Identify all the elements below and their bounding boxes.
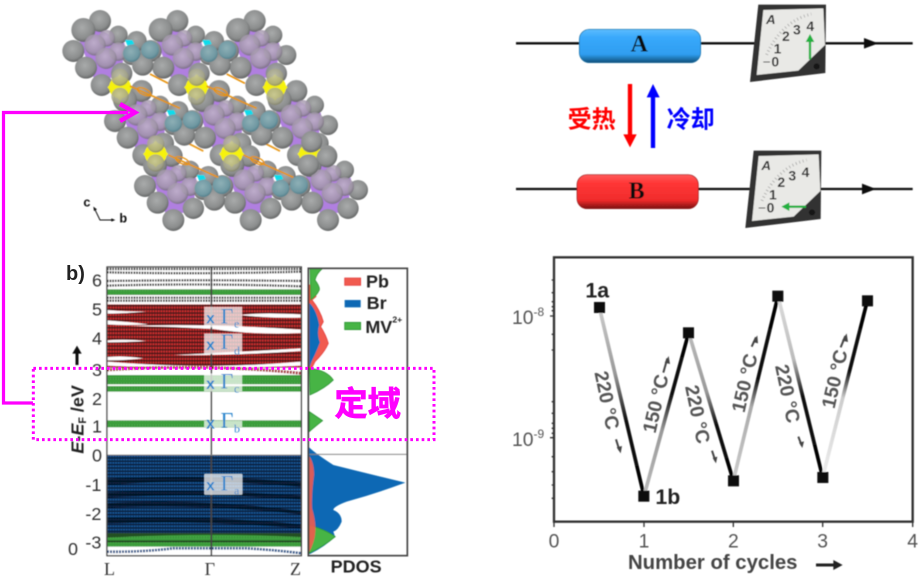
- x tick labels: 0: [549, 531, 559, 552]
- y axis labels: 0: [68, 539, 78, 559]
- PDOS legend: MV: [365, 317, 392, 337]
- temperature labels: 220 °C: [680, 383, 713, 446]
- gamma markers: Γ: [221, 470, 233, 495]
- gamma markers: x: [206, 310, 215, 327]
- PDOS legend: Br: [367, 293, 387, 313]
- y axis labels: [68, 271, 301, 577]
- PDOS label: PDOS: [331, 556, 382, 576]
- gamma markers: x: [206, 376, 215, 393]
- frame and ticks: [550, 257, 913, 527]
- gamma markers: e: [234, 317, 239, 331]
- x axis title: Number of cycles: [628, 552, 797, 574]
- y axis labels: -1: [85, 475, 101, 495]
- point labels: [585, 278, 680, 509]
- top circuit: A: [631, 32, 649, 58]
- y axis labels: -3: [85, 532, 101, 552]
- cooling arrow and label: 冷却: [667, 106, 715, 133]
- bottom circuit: B: [629, 178, 645, 204]
- PDOS legend: [345, 272, 402, 337]
- top circuit: [516, 5, 913, 82]
- PDOS chart: [308, 268, 407, 556]
- valence bands: blue: [107, 455, 301, 533]
- y axis labels: 6: [92, 271, 102, 291]
- flat green bands: [107, 375, 301, 384]
- y axis labels: -2: [85, 504, 101, 524]
- temperature labels: 150 °C: [819, 348, 853, 410]
- y axis labels: 5: [92, 300, 102, 320]
- energy axis title: F: [77, 417, 89, 424]
- x tick labels: 1: [639, 531, 649, 552]
- y tick labels: -9: [533, 427, 544, 441]
- y axis labels: 2: [92, 389, 102, 409]
- gamma markers: x: [206, 337, 215, 354]
- bottom circuit: [516, 151, 913, 228]
- y tick labels: 10: [512, 308, 533, 329]
- heating arrow and label: [568, 84, 637, 147]
- band diagram: [107, 267, 301, 556]
- PDOS legend: 2+: [392, 314, 402, 324]
- gamma markers: Γ: [221, 303, 233, 328]
- gamma markers: a: [234, 483, 240, 497]
- y tick labels: -8: [533, 305, 544, 319]
- gamma markers: x: [206, 477, 215, 494]
- dotted localized box: [33, 368, 434, 440]
- localized label: 定域: [334, 387, 401, 424]
- gamma line and frame: [209, 267, 214, 556]
- point labels: 1b: [655, 485, 680, 509]
- direction arrows: [616, 333, 848, 463]
- y axis labels: 3: [92, 360, 102, 380]
- temperature labels: 150 °C: [729, 352, 763, 414]
- panel label b): b): [66, 263, 85, 285]
- y axis labels: 0: [92, 446, 102, 466]
- x tick labels: 2: [728, 531, 739, 552]
- y axis labels: 4: [92, 328, 102, 348]
- temperature labels: [589, 348, 853, 446]
- temperature labels: 220 °C: [589, 369, 622, 432]
- gamma markers: x: [206, 415, 215, 432]
- energy axis title: E-E: [67, 424, 87, 454]
- energy axis title: [67, 346, 89, 454]
- cooling arrow and label: [647, 84, 715, 148]
- energy axis title: /eV: [67, 385, 87, 417]
- band structure and PDOS: [33, 263, 434, 577]
- lower green bands: [107, 533, 301, 547]
- data line: [599, 296, 867, 496]
- y axis labels: 1: [92, 416, 102, 436]
- gamma markers: c: [234, 382, 239, 396]
- crystal structure: [62, 10, 368, 231]
- axes c and b: b: [119, 212, 127, 226]
- axes c and b: [83, 196, 127, 226]
- y tick labels: 10: [512, 430, 533, 451]
- x tick labels: [549, 531, 918, 552]
- x tick labels: 3: [817, 531, 828, 552]
- magenta connector arrow: [4, 104, 135, 403]
- gamma markers: Γ: [221, 329, 233, 354]
- gamma markers: b: [234, 421, 240, 435]
- gamma markers: Γ: [221, 368, 233, 393]
- x tick labels: 4: [907, 531, 918, 552]
- data points: [594, 291, 873, 502]
- gamma markers: Γ: [221, 408, 233, 433]
- temperature labels: 150 °C: [640, 373, 674, 435]
- PDOS legend: Pb: [366, 272, 389, 292]
- circuit diagram: [516, 5, 913, 228]
- heating arrow and label: 受热: [568, 106, 616, 133]
- temperature labels: 220 °C: [770, 363, 803, 425]
- point labels: 1a: [585, 278, 609, 302]
- axes c and b: c: [83, 196, 90, 210]
- conduction bands: red: [107, 304, 301, 368]
- gamma markers: d: [234, 343, 240, 357]
- y tick labels: [512, 305, 544, 451]
- conductivity cycling chart: [512, 257, 918, 574]
- gamma markers: [204, 303, 243, 497]
- upper bands: [107, 269, 301, 301]
